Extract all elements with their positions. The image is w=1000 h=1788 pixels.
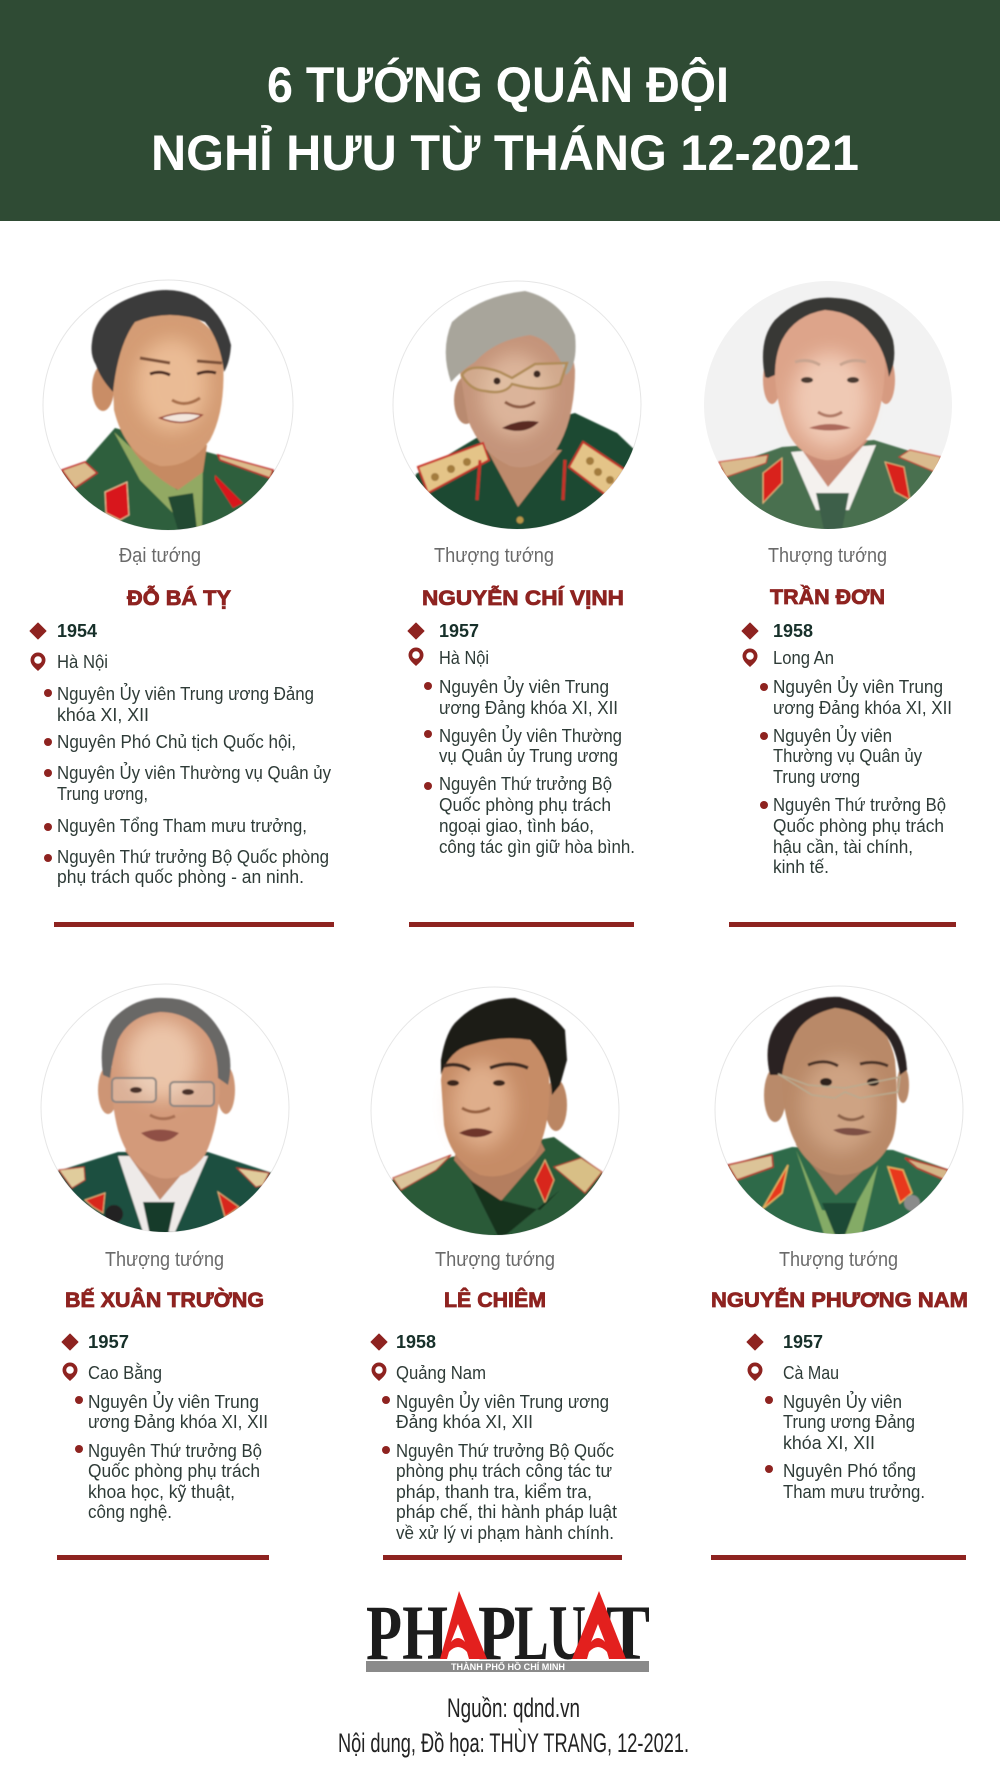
career list bbox=[382, 1391, 617, 1543]
birth year bbox=[30, 621, 97, 641]
hometown bbox=[408, 648, 489, 668]
career list: Trung ương bbox=[773, 767, 860, 787]
icon: diamond bbox=[371, 1334, 387, 1350]
portrait: Bế Xuân Trường bbox=[40, 984, 290, 1240]
portrait: Nguyễn Chí Vịnh bbox=[393, 281, 641, 540]
career list: Nguyên Thứ trưởng Bộ Quốc bbox=[396, 1441, 614, 1461]
name: NGUYỄN PHƯƠNG NAM bbox=[711, 1289, 968, 1312]
icon: diamond bbox=[747, 1334, 763, 1350]
career list: Nguyên Thứ trưởng Bộ bbox=[773, 795, 946, 815]
career list: Đảng khóa XI, XII bbox=[396, 1412, 533, 1432]
career list: Nguyên Thứ trưởng Bộ Quốc phòng bbox=[57, 847, 329, 867]
career list: Tham mưu trưởng. bbox=[783, 1482, 925, 1502]
logo: Pháp Luật: THÀNH PHỐ HỒ CHÍ MINH bbox=[451, 1661, 565, 1673]
career list: Trung ương Đảng bbox=[783, 1412, 915, 1432]
career list: vụ Quân ủy Trung ương bbox=[439, 746, 618, 766]
name: ĐỖ BÁ TỴ bbox=[127, 586, 231, 610]
career list: Thường vụ Quân ủy bbox=[773, 746, 922, 766]
name: NGUYỄN CHÍ VỊNH bbox=[422, 587, 624, 610]
career list: Nguyên Ủy viên Thường bbox=[439, 725, 622, 746]
logo: Pháp Luật: P bbox=[478, 1589, 516, 1676]
career list: về xử lý vi phạm hành chính. bbox=[396, 1523, 614, 1543]
icon: diamond bbox=[30, 623, 46, 639]
hometown: Quảng Nam bbox=[396, 1363, 486, 1383]
hometown: Cà Mau bbox=[783, 1363, 839, 1383]
career list: Nguyên Tổng Tham mưu trưởng, bbox=[57, 816, 307, 836]
title bbox=[151, 56, 859, 181]
career list bbox=[75, 1391, 268, 1522]
hometown bbox=[62, 1362, 162, 1383]
career list: Nguyên Ủy viên Trung ương bbox=[396, 1391, 609, 1412]
career list: Nguyên Ủy viên bbox=[783, 1391, 902, 1412]
career list: Nguyên Phó Chủ tịch Quốc hội, bbox=[57, 732, 296, 752]
panel: Đỗ Bá Tỵ bbox=[30, 280, 334, 927]
career list: công tác gìn giữ hòa bình. bbox=[439, 837, 635, 857]
career list bbox=[44, 683, 331, 887]
icon: location pin bbox=[742, 648, 758, 667]
panel: Nguyễn Chí Vịnh bbox=[393, 281, 641, 927]
birth year: 1957 bbox=[439, 621, 479, 641]
career list: ương Đảng khóa XI, XII bbox=[439, 698, 618, 718]
panel: Bế Xuân Trường bbox=[40, 984, 290, 1560]
panel: Lê Chiêm bbox=[370, 987, 625, 1560]
rank: Thượng tướng bbox=[105, 1249, 224, 1271]
author credit: Nội dung, Đồ họa: THÙY TRANG, 12-2021. bbox=[338, 1727, 689, 1758]
career list: Nguyên Ủy viên Trung bbox=[439, 676, 609, 697]
birth year bbox=[747, 1332, 823, 1352]
name: BẾ XUÂN TRƯỜNG bbox=[65, 1288, 264, 1312]
icon: location pin bbox=[408, 648, 424, 666]
career list: Quốc phòng phụ trách bbox=[773, 816, 944, 836]
birth year bbox=[742, 621, 813, 641]
birth year: 1957 bbox=[88, 1332, 129, 1352]
hometown: Hà Nội bbox=[439, 648, 489, 668]
career list: Trung ương, bbox=[57, 784, 148, 804]
icon: red letter A bbox=[572, 1591, 626, 1659]
birth year bbox=[371, 1332, 436, 1352]
rank: Đại tướng bbox=[119, 545, 201, 567]
career list: hậu cần, tài chính, bbox=[773, 837, 913, 857]
career list: Nguyên Ủy viên Trung ương Đảng bbox=[57, 683, 314, 704]
career list: pháp, thanh tra, kiểm tra, bbox=[396, 1482, 592, 1502]
name: TRẦN ĐƠN bbox=[770, 586, 885, 609]
icon: location pin bbox=[748, 1362, 762, 1381]
portrait: Đỗ Bá Tỵ bbox=[40, 280, 300, 540]
title: 6 TƯỚNG QUÂN ĐỘI bbox=[267, 56, 729, 113]
birth year bbox=[62, 1332, 129, 1352]
rank: Thượng tướng bbox=[779, 1249, 898, 1271]
career list: Nguyên Ủy viên Trung bbox=[773, 676, 943, 697]
career list: Nguyên Ủy viên Trung bbox=[88, 1391, 259, 1412]
hometown: Hà Nội bbox=[57, 652, 108, 672]
career list: khóa XI, XII bbox=[57, 705, 149, 725]
logo: Pháp Luật: T bbox=[606, 1589, 650, 1676]
birth year: 1954 bbox=[57, 621, 97, 641]
icon: red letter A bbox=[440, 1591, 487, 1659]
logo: Pháp Luật: PH bbox=[366, 1589, 448, 1676]
career list: ngoại giao, tình báo, bbox=[439, 816, 594, 836]
hometown bbox=[30, 652, 108, 672]
career list: khoa học, kỹ thuật, bbox=[88, 1482, 235, 1502]
career list: phụ trách quốc phòng - an ninh. bbox=[57, 867, 304, 887]
logo: Pháp Luật bbox=[366, 1589, 650, 1676]
career list bbox=[760, 676, 952, 877]
career list: Nguyên Thứ trưởng Bộ bbox=[88, 1441, 262, 1461]
rank: Thượng tướng bbox=[434, 545, 554, 567]
name: LÊ CHIÊM bbox=[444, 1288, 546, 1312]
career list: Nguyên Thứ trưởng Bộ bbox=[439, 774, 612, 794]
birth year: 1958 bbox=[396, 1332, 436, 1352]
career list: ương Đảng khóa XI, XII bbox=[773, 698, 952, 718]
birth year: 1957 bbox=[783, 1332, 823, 1352]
hometown bbox=[742, 648, 834, 668]
icon: diamond bbox=[742, 623, 758, 639]
birth year: 1958 bbox=[773, 621, 813, 641]
header banner bbox=[0, 0, 1000, 221]
icon: location pin bbox=[62, 1362, 78, 1381]
career list: Quốc phòng phụ trách bbox=[439, 795, 611, 815]
rank: Thượng tướng bbox=[435, 1249, 555, 1271]
logo: Pháp Luật: LU bbox=[514, 1589, 586, 1676]
icon: diamond bbox=[62, 1334, 78, 1350]
career list: khóa XI, XII bbox=[783, 1433, 875, 1453]
career list: phòng phụ trách công tác tư bbox=[396, 1461, 612, 1481]
career list: kinh tế. bbox=[773, 857, 829, 877]
hometown: Long An bbox=[773, 648, 834, 668]
portrait: Lê Chiêm bbox=[370, 987, 625, 1240]
hometown: Cao Bằng bbox=[88, 1362, 162, 1383]
portrait: Nguyễn Phương Nam bbox=[710, 986, 970, 1240]
icon: diamond bbox=[408, 623, 424, 639]
portrait: Trần Đơn bbox=[700, 281, 960, 540]
career list bbox=[424, 676, 635, 857]
rank: Thượng tướng bbox=[768, 545, 887, 567]
career list: ương Đảng khóa XI, XII bbox=[88, 1412, 268, 1432]
icon: location pin bbox=[30, 652, 46, 671]
career list: công nghệ. bbox=[88, 1502, 172, 1522]
icon: location pin bbox=[372, 1362, 386, 1381]
hometown bbox=[748, 1362, 839, 1383]
career list bbox=[765, 1391, 925, 1502]
career list: Quốc phòng phụ trách bbox=[88, 1461, 260, 1481]
career list: Nguyên Ủy viên bbox=[773, 725, 892, 746]
career list: Nguyên Ủy viên Thường vụ Quân ủy bbox=[57, 762, 331, 783]
title: NGHỈ HƯU TỪ THÁNG 12-2021 bbox=[151, 125, 859, 181]
birth year bbox=[408, 621, 479, 641]
panel: Trần Đơn bbox=[700, 281, 960, 927]
source credit: Nguồn: qdnd.vn bbox=[447, 1693, 580, 1723]
panel: Nguyễn Phương Nam bbox=[710, 986, 970, 1560]
career list: Nguyên Phó tổng bbox=[783, 1461, 916, 1481]
career list: pháp chế, thi hành pháp luật bbox=[396, 1502, 617, 1522]
